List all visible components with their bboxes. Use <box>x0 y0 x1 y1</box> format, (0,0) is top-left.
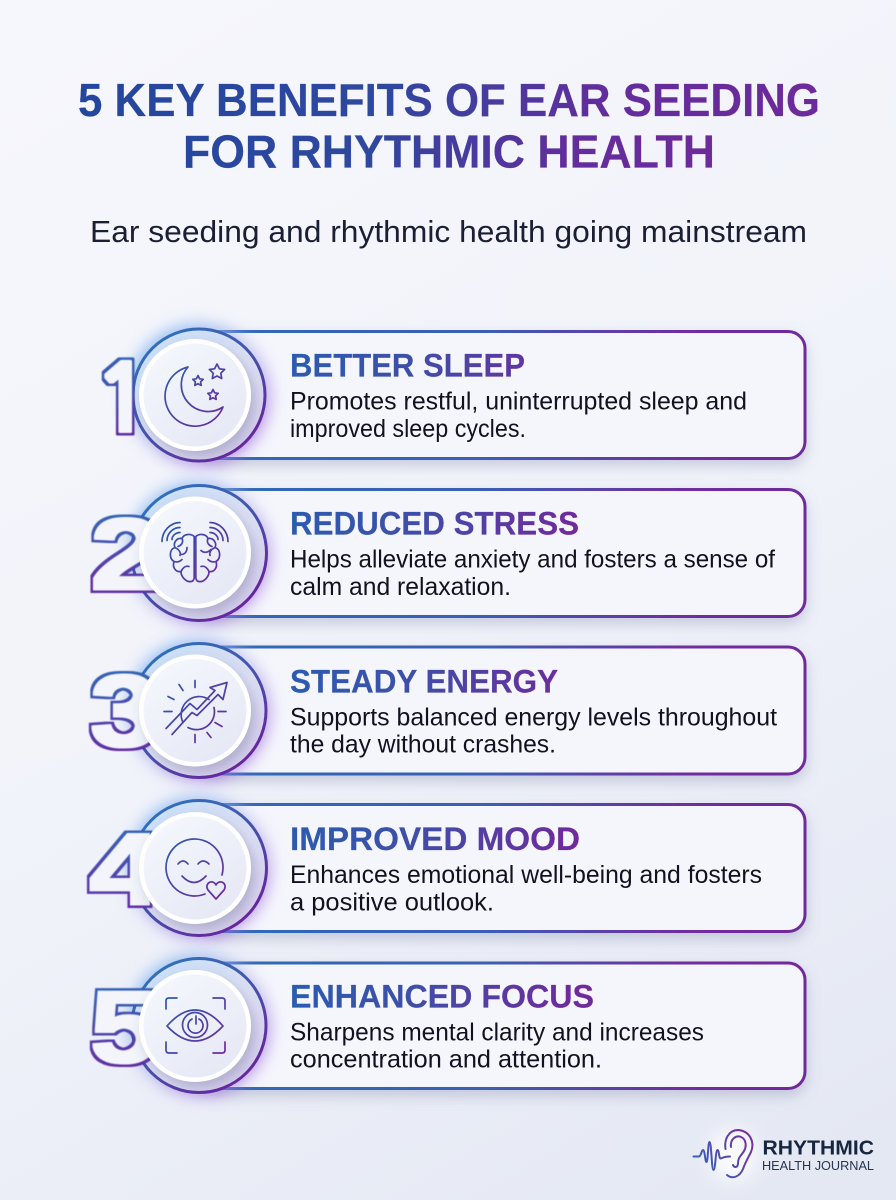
description: Enhances emotional well-being and fosters <box>290 861 762 889</box>
number 2: 2 <box>90 499 162 611</box>
icon: moon and stars <box>165 364 225 426</box>
card outline <box>200 490 805 616</box>
panel: reduced stress <box>90 482 805 624</box>
description <box>290 704 777 758</box>
card outline <box>200 804 805 932</box>
number 3: 3 <box>90 656 158 768</box>
logo tagline: HEALTH JOURNAL <box>762 1159 874 1173</box>
logo: rhythmic health journal <box>694 1129 874 1181</box>
description: improved sleep cycles. <box>290 415 526 443</box>
heading: IMPROVED MOOD <box>290 821 580 857</box>
disc <box>139 339 251 451</box>
icon: brain with waves <box>162 522 228 582</box>
disc <box>139 812 251 924</box>
title <box>78 74 820 178</box>
description: calm and relaxation. <box>290 573 511 601</box>
description: Promotes restful, uninterrupted sleep and <box>290 388 747 416</box>
description: concentration and attention. <box>290 1046 602 1074</box>
icon: sun with rising arrow <box>164 680 227 742</box>
ring <box>132 644 266 778</box>
title: 5 KEY BENEFITS OF EAR SEEDING <box>78 74 820 126</box>
panel: steady energy <box>90 640 805 782</box>
description: the day without crashes. <box>290 730 556 758</box>
description <box>290 546 775 601</box>
logo name: RHYTHMIC <box>762 1138 874 1160</box>
description: Sharpens mental clarity and increases <box>290 1018 704 1046</box>
description: Helps alleviate anxiety and fosters a sense of <box>290 546 775 574</box>
description: Supports balanced energy levels throughout <box>290 704 777 732</box>
disc <box>139 654 251 766</box>
ring <box>132 800 266 936</box>
card outline <box>200 647 805 774</box>
description <box>290 861 762 916</box>
disc <box>139 496 251 608</box>
panel: enhanced focus <box>90 954 805 1096</box>
ring <box>133 329 265 461</box>
icon: waveform and ear <box>694 1130 752 1177</box>
number 4: 4 <box>89 814 161 926</box>
description <box>290 1018 704 1074</box>
glow <box>128 954 270 1096</box>
number 5: 5 <box>90 972 158 1084</box>
panel: better sleep <box>93 324 805 466</box>
card outline <box>200 963 805 1088</box>
description: a positive outlook. <box>290 888 494 916</box>
number 1: 1 <box>93 354 153 445</box>
description <box>290 388 747 443</box>
heading: REDUCED STRESS <box>290 506 579 542</box>
glow <box>128 324 270 466</box>
card outline <box>200 332 805 458</box>
subtitle: Ear seeding and rhythmic health going mainstream <box>90 214 807 249</box>
heading: ENHANCED FOCUS <box>290 978 594 1014</box>
glow <box>128 640 270 782</box>
icon: eye in focus frame <box>166 998 225 1053</box>
heading: BETTER SLEEP <box>290 348 525 384</box>
ring <box>132 486 266 620</box>
heading: STEADY ENERGY <box>290 664 558 700</box>
glow <box>128 797 270 939</box>
panel: improved mood <box>89 797 805 939</box>
glow <box>128 482 270 624</box>
disc <box>139 970 251 1082</box>
icon: smiling face with heart <box>166 839 225 899</box>
title: FOR RHYTHMIC HEALTH <box>183 126 715 178</box>
ring <box>132 958 266 1092</box>
